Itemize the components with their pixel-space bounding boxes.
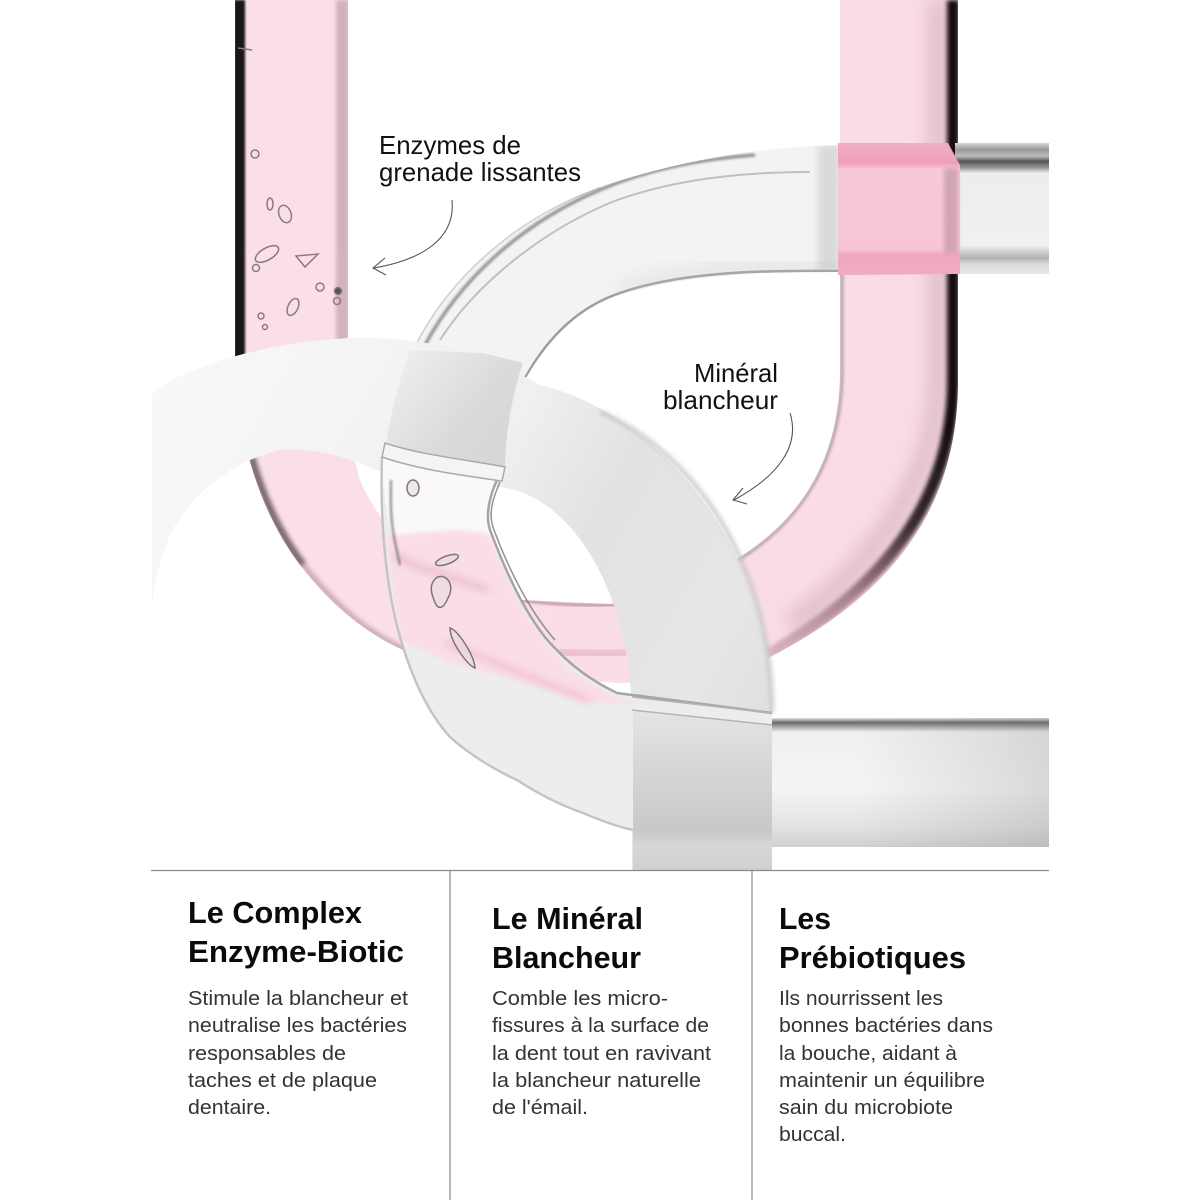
column: le complex enzyme-biotic: neutralise les bactéries	[188, 1014, 407, 1037]
column: les prébiotiques: sain du microbiote	[779, 1096, 953, 1119]
label: enzymes de grenade lissantes: Enzymes de	[379, 130, 521, 160]
column: les prébiotiques: maintenir un équilibre	[779, 1069, 985, 1092]
label: minéral blancheur	[663, 358, 778, 415]
column: le minéral blancheur: de l'émail.	[492, 1096, 588, 1119]
frosted overlap on arch	[385, 350, 523, 472]
column: le complex enzyme-biotic: taches et de plaque	[188, 1069, 377, 1092]
column: le complex enzyme-biotic: Stimule la blancheur et	[188, 987, 408, 1010]
column: les prébiotiques: Prébiotiques	[779, 940, 966, 975]
arrow: to pink tube	[373, 200, 452, 275]
column: les prébiotiques: la bouche, aidant à	[779, 1042, 958, 1065]
column: le complex enzyme-biotic: Le Complex	[188, 895, 363, 930]
frosted square crossing and stem	[633, 711, 772, 870]
column: le minéral blancheur: fissures à la surface de	[492, 1014, 709, 1037]
label: enzymes de grenade lissantes	[379, 130, 581, 187]
right glass tube, upper	[955, 143, 1049, 274]
clear glass arch	[416, 145, 838, 378]
pink glass tube	[234, 0, 958, 683]
label: minéral blancheur: Minéral	[694, 358, 778, 388]
label: minéral blancheur: blancheur	[663, 385, 778, 415]
column: le complex enzyme-biotic: dentaire.	[188, 1096, 271, 1119]
column: les prébiotiques: buccal.	[779, 1123, 846, 1146]
glass collar	[382, 443, 505, 481]
arrow: to ring	[733, 413, 793, 504]
column: les prébiotiques: Ils nourrissent les	[779, 987, 943, 1010]
bubbles in pink tube	[238, 48, 342, 330]
column: le complex enzyme-biotic: responsables de	[188, 1042, 346, 1065]
hero photo: glass tubes	[152, 0, 1049, 870]
column: le minéral blancheur: Comble les micro-	[492, 987, 668, 1010]
column: le minéral blancheur	[492, 901, 711, 1119]
collar lines	[632, 697, 772, 725]
table rules	[151, 870, 1049, 1200]
column: les prébiotiques	[779, 901, 993, 1146]
column: le minéral blancheur: la dent tout en ravivant	[492, 1042, 711, 1065]
column: le minéral blancheur: la blancheur naturelle	[492, 1069, 701, 1092]
pink liquid	[385, 531, 640, 705]
label: enzymes de grenade lissantes: grenade lissantes	[379, 157, 581, 187]
column: les prébiotiques: bonnes bactéries dans	[779, 1014, 993, 1037]
right glass tube, lower	[772, 718, 1049, 847]
column: le minéral blancheur: Le Minéral	[492, 901, 643, 936]
column: les prébiotiques: Les	[779, 901, 831, 936]
clear glass lower bend	[378, 443, 773, 845]
droplets	[407, 480, 475, 668]
infographic canvas	[151, 0, 1049, 1200]
column: le complex enzyme-biotic: Enzyme-Biotic	[188, 934, 404, 969]
pink crossing square	[838, 143, 960, 275]
frosted white ring	[152, 338, 772, 870]
column: le minéral blancheur: Blancheur	[492, 940, 641, 975]
column: le complex enzyme-biotic	[188, 895, 408, 1119]
